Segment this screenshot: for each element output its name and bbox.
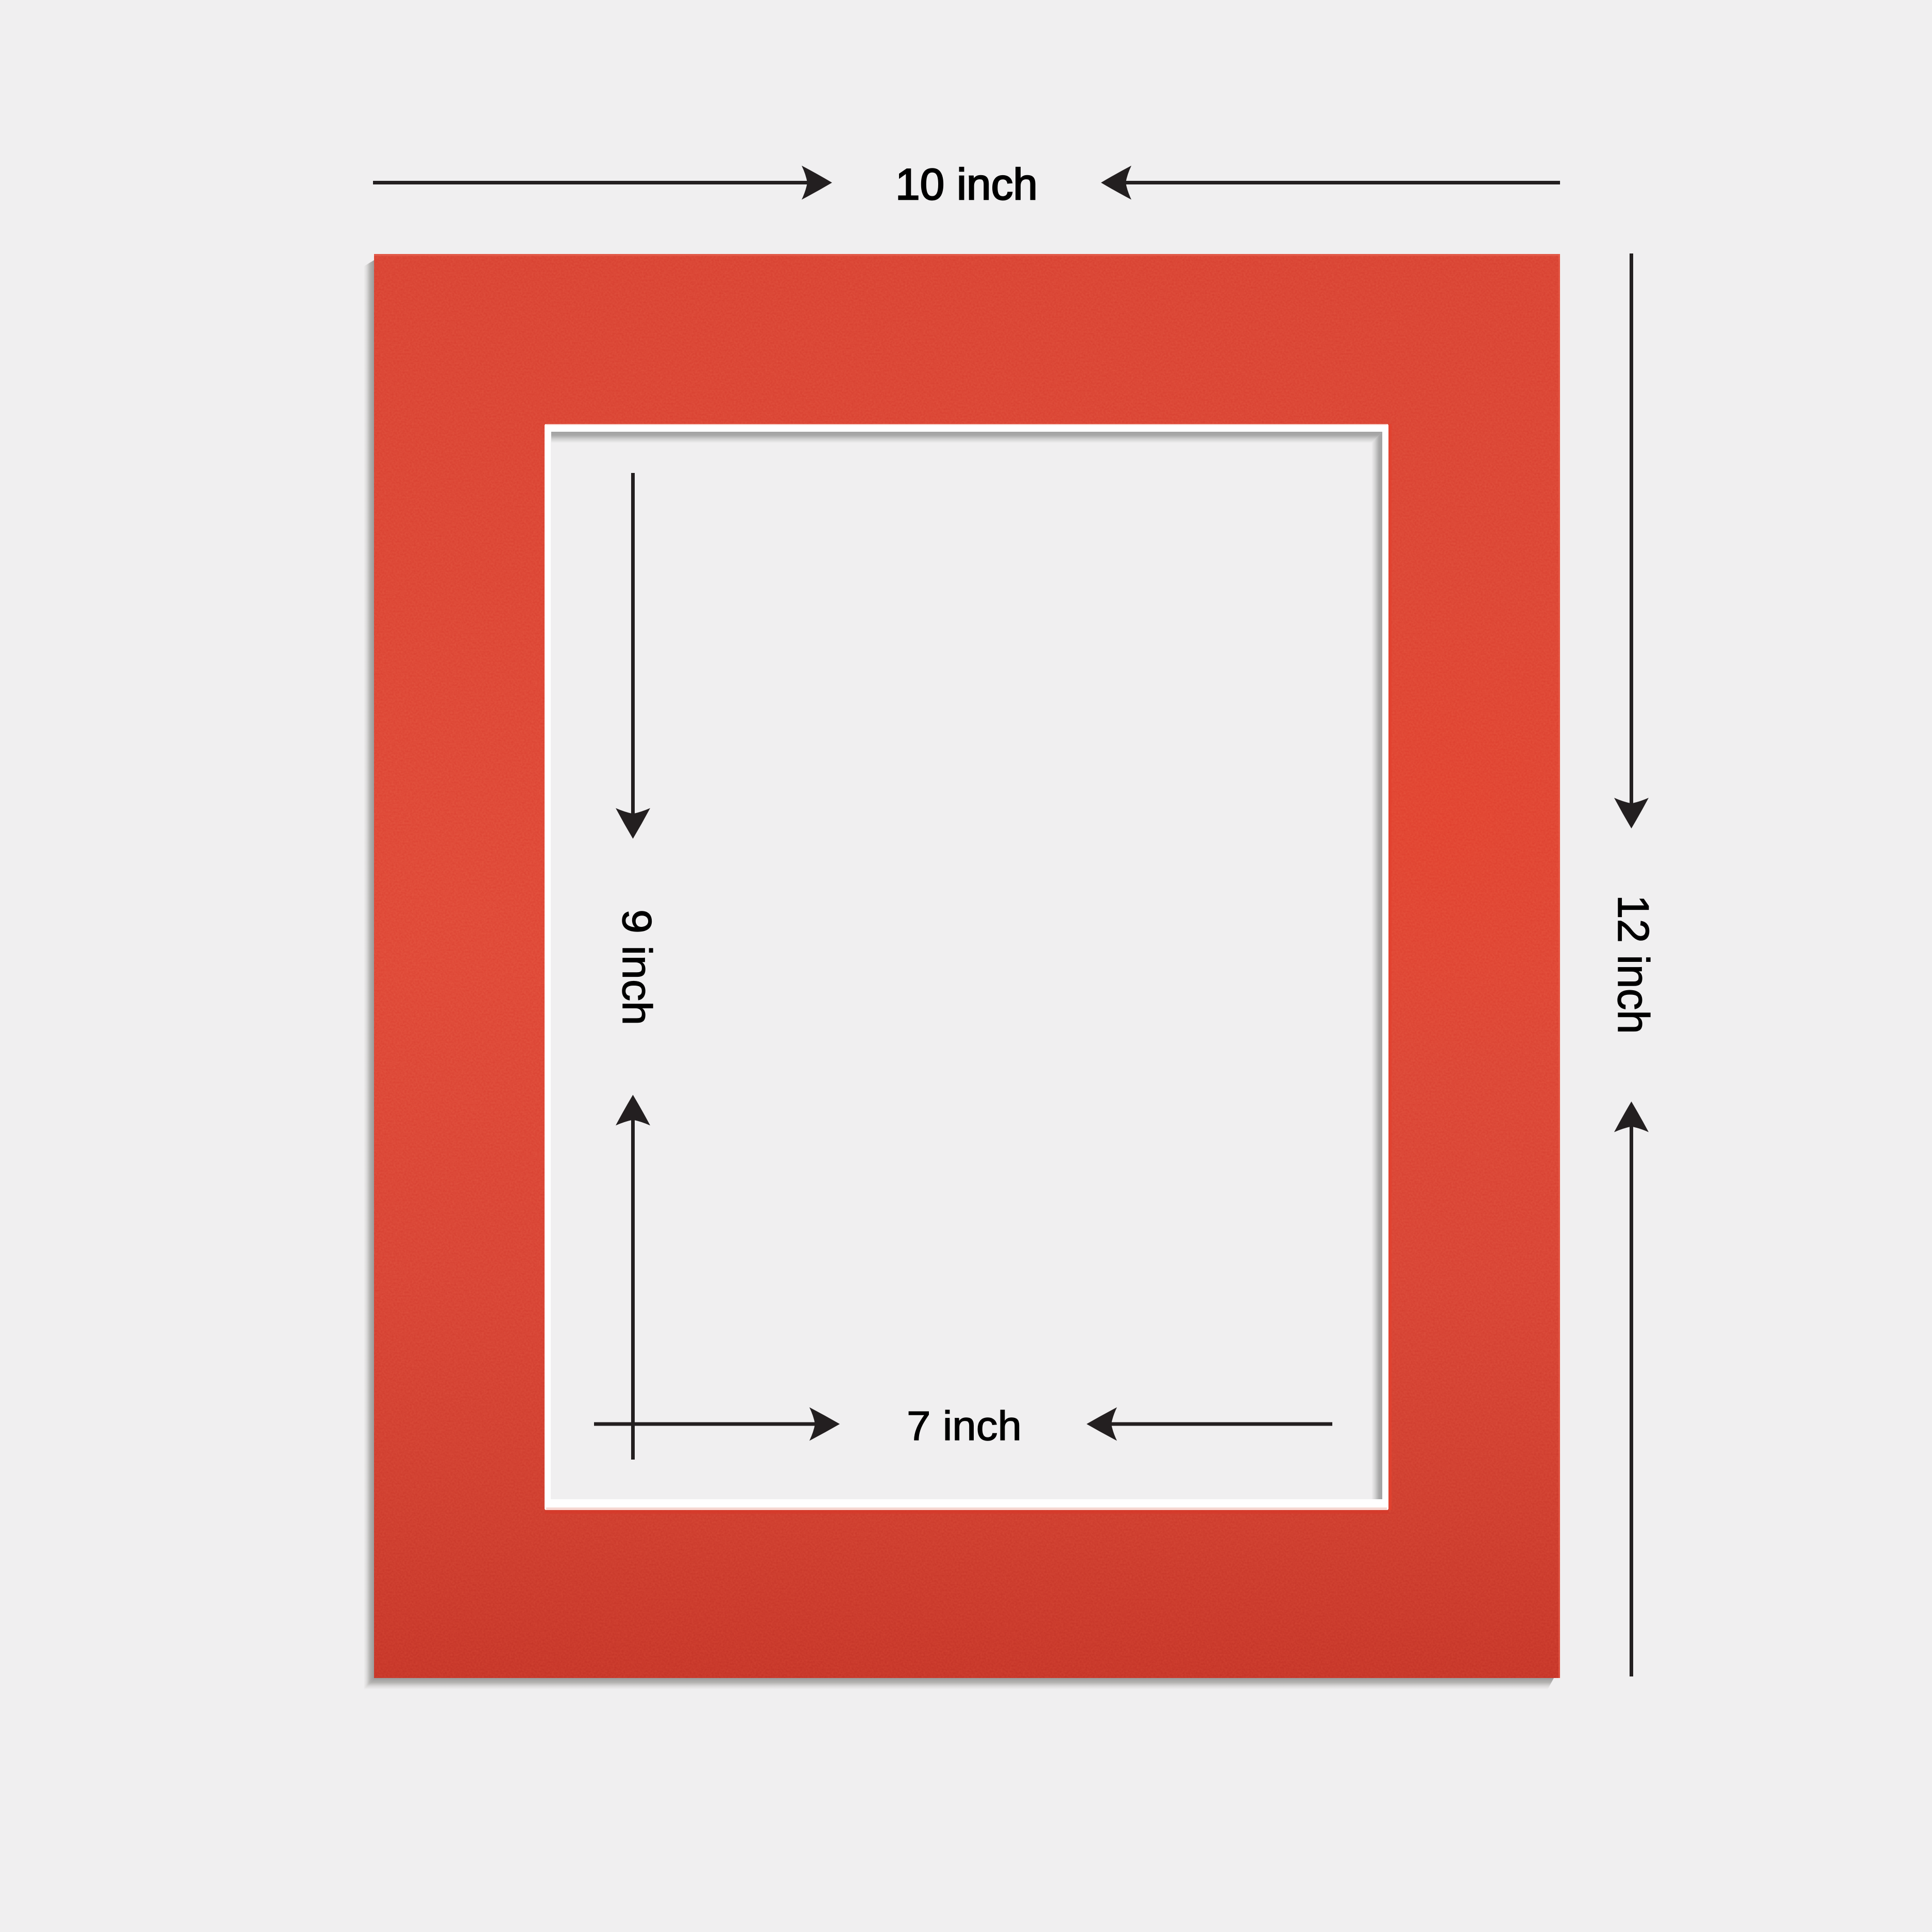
inner dimension: 9 inch xyxy=(614,473,660,1460)
arrow: 7 inch left xyxy=(594,1408,840,1440)
red mat surface xyxy=(374,254,1560,1678)
arrow: 10 inch left xyxy=(373,166,832,200)
arrow: 7 inch right xyxy=(1087,1408,1332,1440)
panel: red mat board frame xyxy=(364,254,1560,1689)
label: 7 inch: 7 inch xyxy=(907,1403,1022,1449)
arrow: 9 inch top xyxy=(616,473,650,839)
arrow: 9 inch bottom xyxy=(616,1095,650,1460)
label: 9 inch: 9 inch xyxy=(614,909,660,1025)
arrow: 12 inch top xyxy=(1614,253,1649,828)
inner bevel shadow xyxy=(551,432,1382,1499)
arrow: 12 inch bottom xyxy=(1614,1101,1649,1676)
inner dimension: 7 inch xyxy=(594,1403,1332,1449)
top dimension: 10 inch xyxy=(373,160,1560,209)
label: 12 inch: 12 inch xyxy=(1608,895,1657,1034)
window opening with white bevel xyxy=(545,424,1392,1514)
label: 10 inch: 10 inch xyxy=(895,160,1038,209)
frame drop shadow xyxy=(364,260,1554,1689)
right dimension: 12 inch xyxy=(1608,253,1657,1676)
arrow: 10 inch right xyxy=(1101,166,1560,200)
